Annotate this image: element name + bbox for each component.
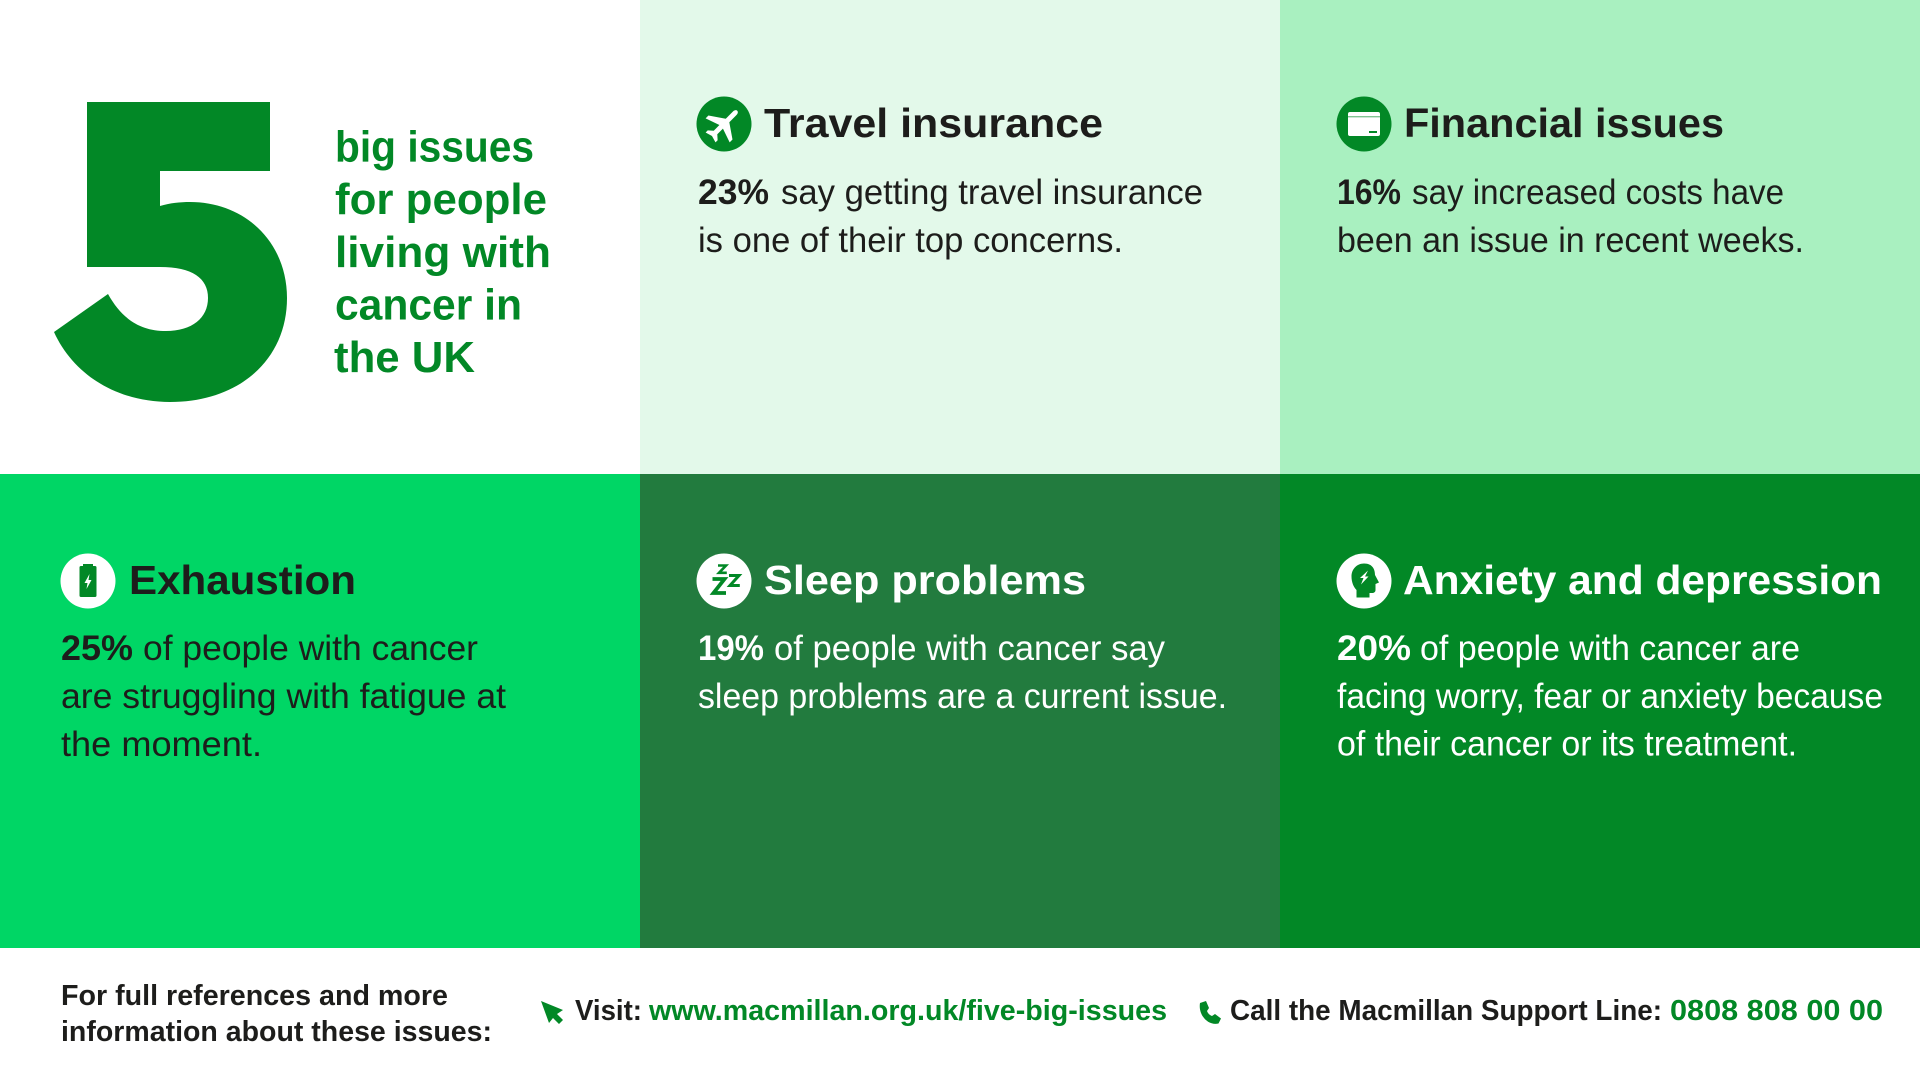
icon: sleep zzz (696, 554, 752, 608)
title: Financial issues (1404, 100, 1724, 146)
references note (61, 980, 492, 1048)
panel: footer (61, 980, 1883, 1048)
icon: cursor (541, 1001, 563, 1024)
panel: exhaustion (0, 474, 640, 948)
body text: of their cancer or its treatment. (1337, 724, 1797, 764)
panel: sleep problems (640, 474, 1280, 948)
title: Anxiety and depression (1403, 557, 1882, 603)
references note: information about these issues: (61, 1016, 492, 1048)
panel: headline (54, 102, 551, 402)
body text (698, 629, 1227, 716)
body text: the moment. (61, 725, 262, 764)
heading text: cancer in (335, 280, 522, 330)
big number five (54, 102, 287, 402)
icon: head with bolt (1336, 554, 1392, 608)
body text: sleep problems are a current issue. (698, 677, 1227, 716)
body text: is one of their top concerns. (698, 221, 1123, 260)
body text: 19% (698, 629, 764, 668)
panel: anxiety and depression (1280, 474, 1920, 948)
body text (1337, 173, 1804, 260)
heading text (334, 122, 551, 382)
support line: 0808 808 00 00 (1670, 995, 1883, 1027)
body text (698, 173, 1203, 260)
heading text: the UK (334, 333, 475, 382)
body text (1337, 629, 1883, 764)
body text: 16% (1337, 173, 1401, 212)
body text: 25% (61, 629, 133, 668)
panel: travel insurance (640, 0, 1280, 474)
heading text: for people (335, 175, 547, 224)
heading text: big issues (335, 122, 534, 172)
icon: bank card (1336, 96, 1392, 152)
title: Travel insurance (764, 100, 1103, 146)
body text: 20% (1337, 629, 1411, 668)
body text: of people with cancer (143, 629, 478, 668)
body text: 23% (698, 173, 769, 212)
heading text: living with (335, 228, 551, 277)
body text: of people with cancer say (774, 629, 1165, 668)
title: Sleep problems (764, 557, 1086, 603)
website link: www.macmillan.org.uk/five-big-issues (648, 995, 1167, 1027)
references note: For full references and more (61, 980, 448, 1012)
body text: facing worry, fear or anxiety because (1337, 677, 1883, 716)
support line: Call the Macmillan Support Line: (1230, 995, 1662, 1027)
body text: say increased costs have (1412, 173, 1784, 212)
title: Exhaustion (129, 557, 356, 603)
body text: say getting travel insurance (781, 173, 1203, 212)
panel: financial issues (1280, 0, 1920, 474)
body text: are struggling with fatigue at (61, 677, 506, 716)
icon: battery (60, 554, 116, 608)
body text: been an issue in recent weeks. (1337, 221, 1804, 260)
icon: phone (1200, 1001, 1221, 1024)
body text: of people with cancer are (1420, 629, 1800, 668)
body text (61, 629, 506, 764)
icon: plane (696, 96, 752, 152)
website link: Visit: (575, 995, 642, 1027)
